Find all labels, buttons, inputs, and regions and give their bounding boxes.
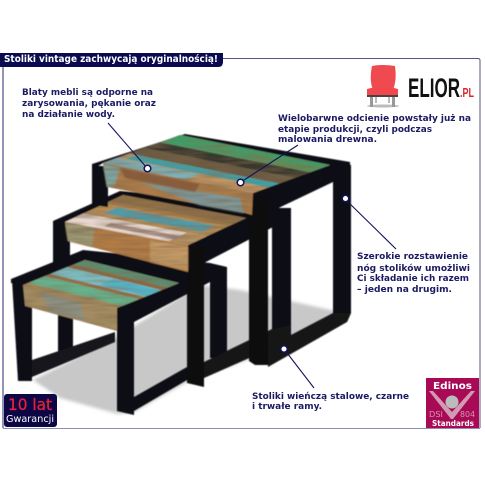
middle table (53, 191, 291, 387)
frame border (3, 58, 480, 428)
icon: red chair (367, 65, 399, 108)
header banner: Stoliki vintage zachwycają oryginalnością! (4, 54, 218, 65)
floor shadow (33, 285, 340, 414)
badge: Edinos standards: Edinos (433, 381, 472, 392)
callout: leg spacing: Ci składanie ich razem (357, 274, 469, 284)
small table (11, 250, 227, 415)
callout: colours: etapie produkcji, czyli podczas (278, 125, 432, 135)
logo: Elior.pl (367, 65, 474, 108)
callout: table top durability (22, 88, 156, 172)
callout: table top durability: Blaty mebli są odporne na (22, 88, 153, 98)
logo: Elior.pl: .PL (460, 85, 474, 100)
big table (92, 134, 351, 367)
callout: colours: Wielobarwne odcienie powstały już na (278, 114, 471, 124)
callout: steel frames: Stoliki wieńczą stalowe, czarne (252, 392, 409, 402)
callout: table top durability: zarysowania, pękanie oraz (22, 99, 156, 109)
callout: steel frames: i trwałe ramy. (252, 402, 322, 412)
badge: 10 lat gwarancji (4, 394, 57, 427)
callout: leg spacing: nóg stolików umożliwi (357, 263, 470, 274)
callout: leg spacing: – jeden na drugim. (357, 285, 452, 295)
badge: Edinos standards (426, 378, 479, 428)
photo: nesting tables (11, 134, 351, 415)
badge: Edinos standards: 804 (460, 410, 475, 419)
callout: leg spacing: Szerokie rozstawienie (357, 252, 468, 262)
badge: 10 lat gwarancji: 10 lat (8, 395, 52, 414)
callout: leg spacing (342, 195, 470, 295)
callout: colours (237, 114, 471, 186)
badge: Edinos standards: DSI (429, 410, 443, 419)
badge: 10 lat gwarancji: Gwarancji (6, 414, 54, 425)
badge: Edinos standards: Standards (432, 419, 475, 428)
callout: colours: malowania drewna. (278, 135, 377, 145)
callout: table top durability: na działanie wody. (22, 110, 115, 120)
callout: steel frames (252, 346, 409, 412)
